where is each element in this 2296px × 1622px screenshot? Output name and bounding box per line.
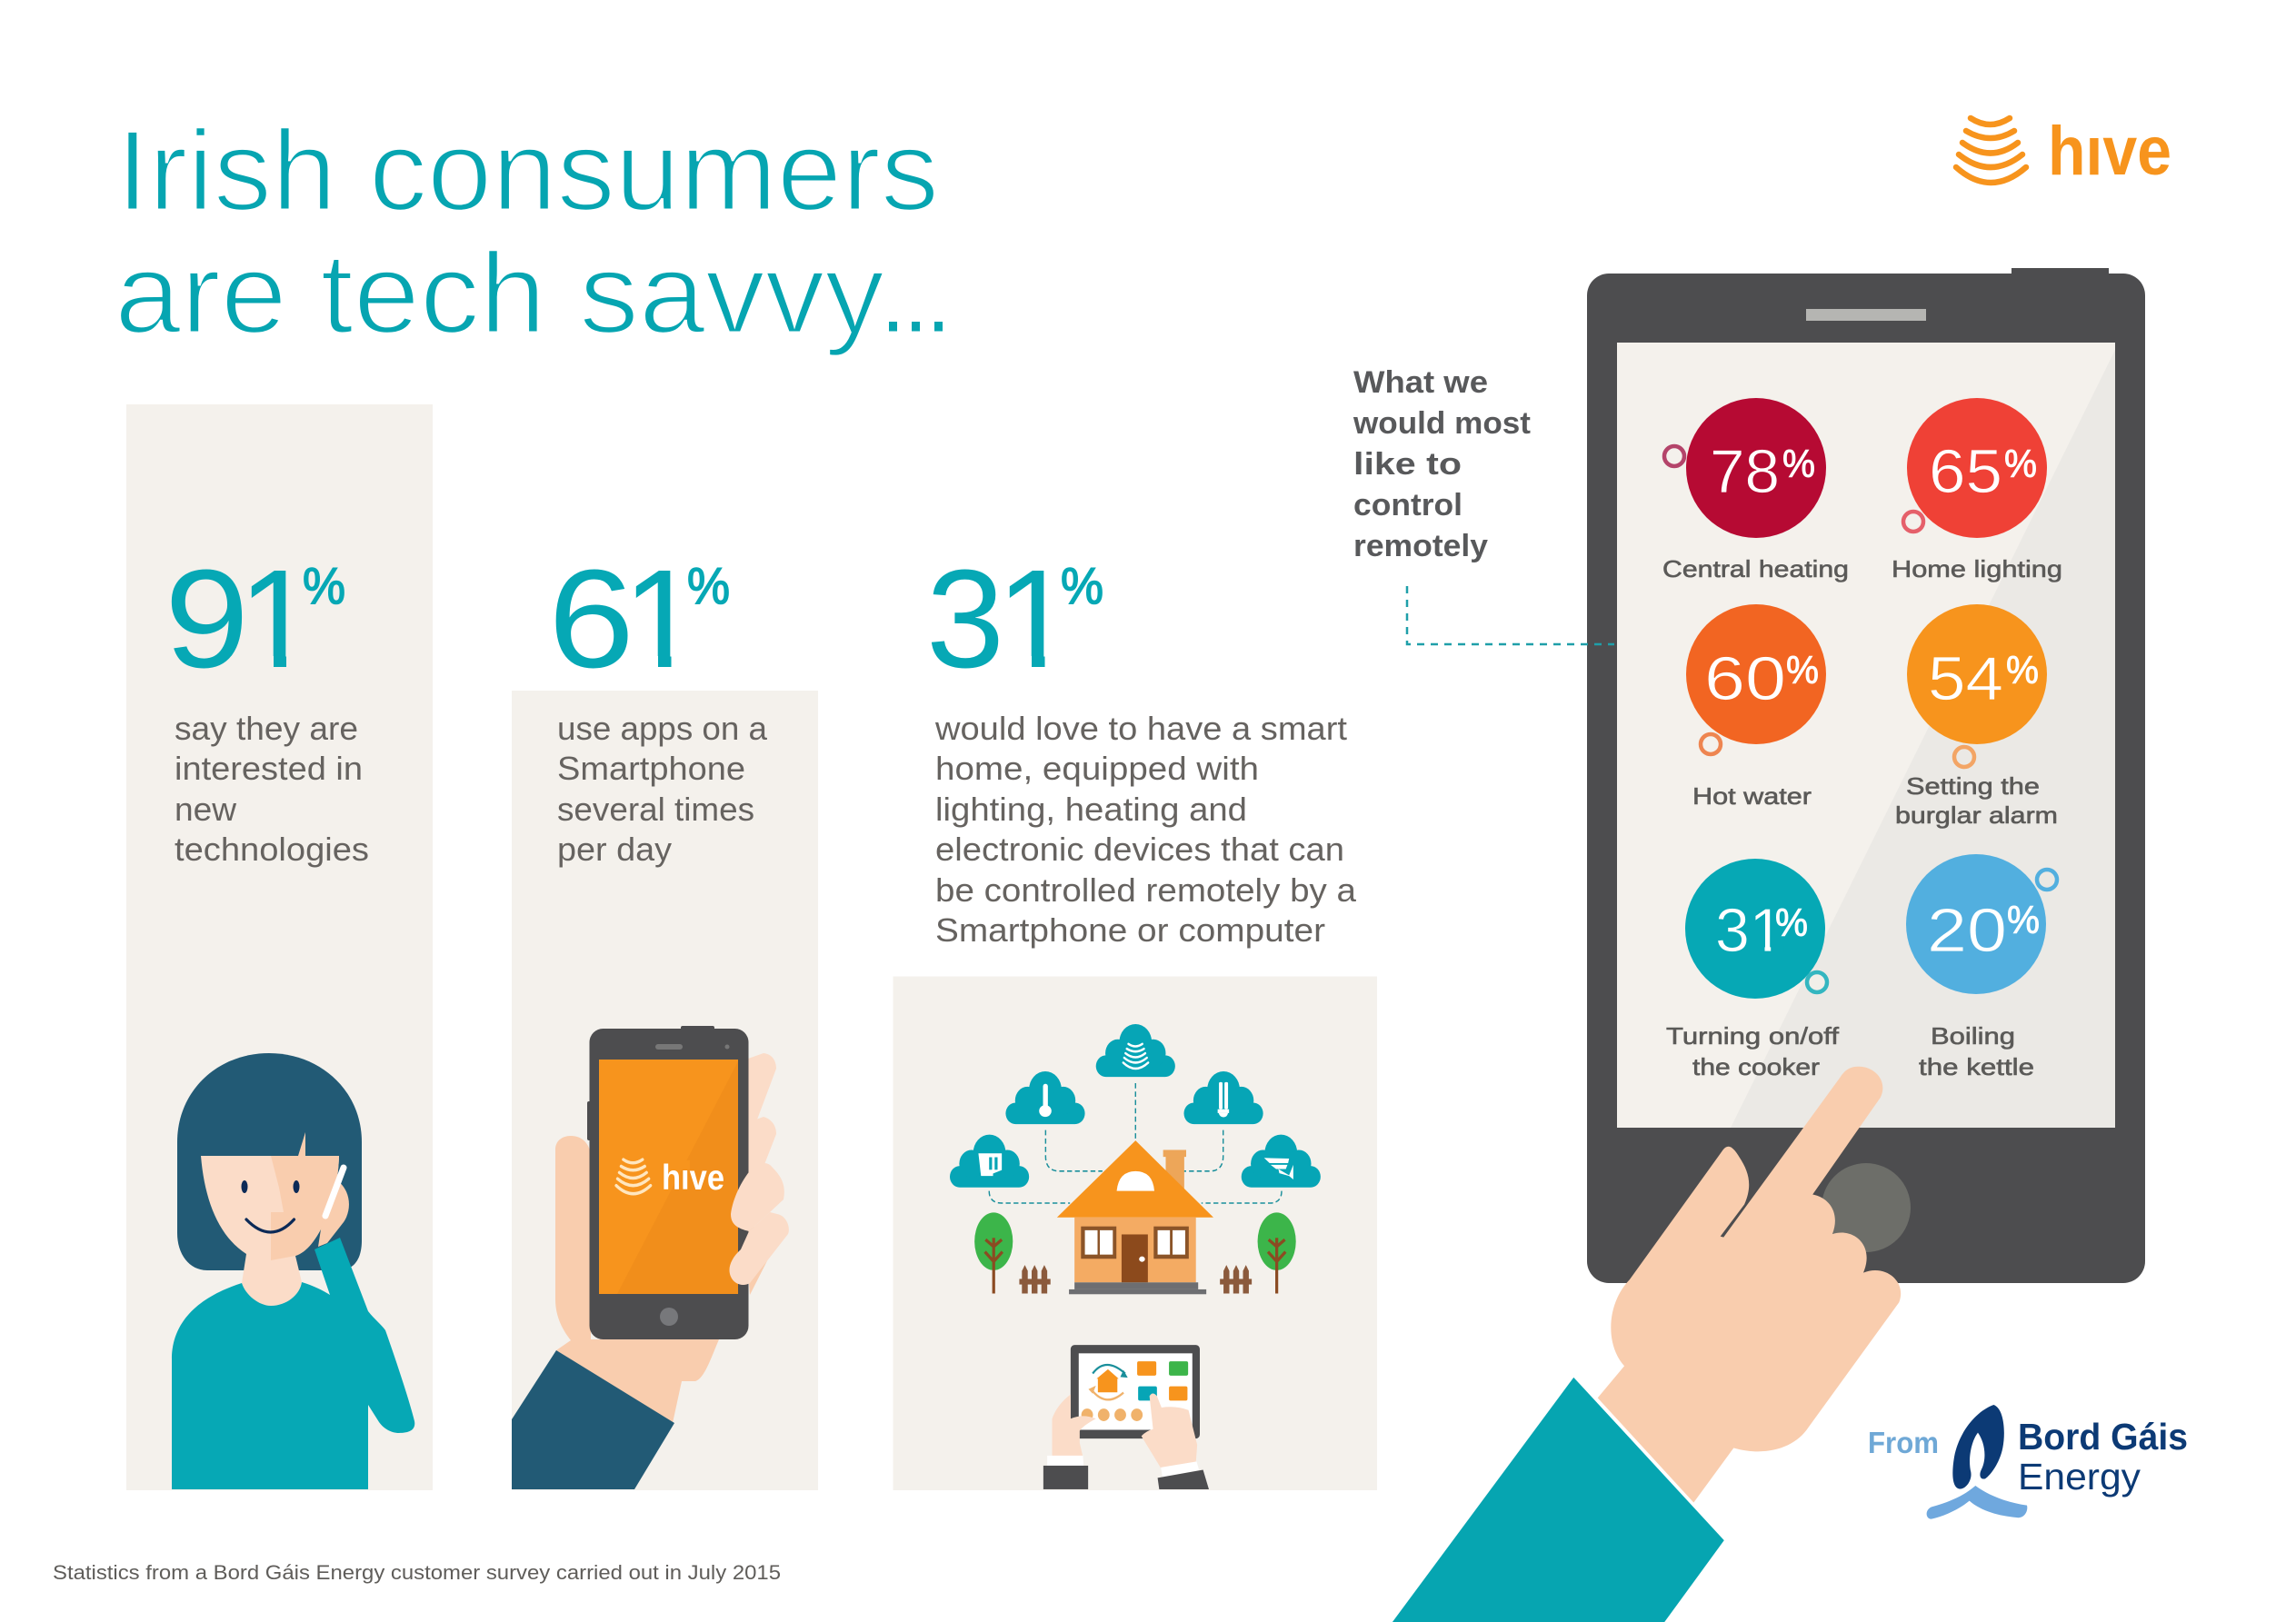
illustration: hand holding smartphone <box>512 1026 789 1489</box>
icon: hive logo on phone screen <box>616 1159 724 1198</box>
stat: 31% turning on/off the cooker: % <box>1775 901 1808 945</box>
statistic: 31%: 3 <box>926 541 1004 697</box>
stat: 31% turning on/off the cooker <box>1666 859 1840 1080</box>
title: are tech savvy <box>115 229 884 357</box>
statistic: 31%: % <box>1061 557 1103 615</box>
stat: 60% hot water <box>1686 604 1826 810</box>
illustration: hands using tablet <box>1043 1345 1209 1489</box>
text: what we would most like to control remotely: like to <box>1353 447 1462 482</box>
title: Irish consumers <box>116 106 939 234</box>
stat: 54% setting the burglar alarm: burglar alarm <box>1895 801 2058 829</box>
text: 61% description: Smartphone <box>557 750 745 787</box>
statistic: 61%: % <box>687 557 730 615</box>
panel: 31% smart home text <box>926 541 1357 949</box>
text: 91% description: interested in <box>175 750 363 787</box>
text: 31% description: electronic devices that can <box>935 831 1344 868</box>
text: 31% description: Smartphone or computer <box>935 911 1325 949</box>
panel: smart home illustration <box>893 976 1377 1490</box>
stat: 54% setting the burglar alarm: 54 <box>1928 644 2003 713</box>
text: what we would most like to control remotely: What we <box>1353 365 1488 400</box>
connector: dashed line to phone <box>1407 586 1614 644</box>
stat: 60% hot water: % <box>1786 649 1819 692</box>
stat: 78% central heating <box>1662 398 1849 582</box>
logo: from Bord Gáis Energy <box>1868 1405 2188 1519</box>
icon: cloud with light bulb <box>1183 1071 1263 1124</box>
stat: 20% boiling the kettle: the kettle <box>1919 1053 2034 1080</box>
text: what we would most like to control remotely: control <box>1353 488 1462 522</box>
logo: from Bord Gáis Energy: Energy <box>2018 1456 2141 1498</box>
statistic: 31% <box>926 541 1103 697</box>
logo: hive <box>1956 113 2171 190</box>
illustration: fences <box>1019 1265 1252 1294</box>
statistic: 61% <box>548 541 730 697</box>
statistic: 91%: 9 <box>165 541 249 697</box>
text: what we would most like to control remotely: remotely <box>1353 529 1488 563</box>
stat: 20% boiling the kettle: 20 <box>1927 896 2007 965</box>
logo: from Bord Gáis Energy: Bord Gáis <box>2018 1416 2188 1458</box>
icon: cloud with security camera <box>1242 1135 1321 1188</box>
stat: 20% boiling the kettle: % <box>2007 899 2040 942</box>
text: 31% description: lighting, heating and <box>935 791 1247 828</box>
stat: 54% setting the burglar alarm: Setting the <box>1906 772 2040 800</box>
stat: 31% turning on/off the cooker: 3 <box>1715 896 1750 965</box>
text: 61% description: per day <box>557 831 672 868</box>
stat: 78% central heating: 78 <box>1710 437 1780 506</box>
statistic: 31%: 1 <box>996 541 1074 697</box>
icon: cloud with thermometer <box>1005 1071 1085 1124</box>
logo: from Bord Gáis Energy: From <box>1868 1426 1939 1459</box>
text: 31% description: be controlled remotely by a <box>935 871 1357 909</box>
icon: cloud with kettle <box>950 1135 1029 1188</box>
statistic: 91% <box>165 541 345 697</box>
stat: 65% home lighting: Home lighting <box>1892 555 2062 582</box>
stat: 31% turning on/off the cooker: Turning on/off <box>1666 1022 1840 1050</box>
illustration: trees <box>974 1212 1296 1294</box>
text: what we would most like to control remotely <box>1353 365 1531 563</box>
text: 91% description <box>175 710 369 868</box>
logo: hive: hive <box>2048 113 2171 190</box>
stat: 31% turning on/off the cooker: 1 <box>1749 896 1783 965</box>
stat: 31% turning on/off the cooker: the cooker <box>1692 1053 1820 1080</box>
icon: cloud with hive logo <box>1096 1024 1175 1077</box>
text: 91% description: say they are <box>175 710 358 747</box>
text: what we would most like to control remotely: would most <box>1353 406 1531 441</box>
text: 91% description: technologies <box>175 831 369 868</box>
stat: 60% hot water: Hot water <box>1692 782 1812 810</box>
icon: hive logo on phone screen: hive <box>662 1159 724 1198</box>
title <box>115 106 945 357</box>
stat: 20% boiling the kettle: Boiling <box>1931 1022 2015 1050</box>
text: 31% description: home, equipped with <box>935 750 1259 787</box>
footnote: Statistics from a Bord Gáis Energy customer survey carried out in July 2015 <box>53 1561 781 1584</box>
illustration: woman on the phone <box>172 1053 414 1489</box>
illustration: pointing hand <box>1393 1067 1901 1622</box>
text: 31% description <box>934 710 1357 949</box>
stat: 65% home lighting: 65 <box>1929 437 2002 506</box>
text: 61% description: use apps on a <box>557 710 768 747</box>
text: 61% description: several times <box>557 791 754 828</box>
panel: 91% interested in new technologies <box>126 404 433 1490</box>
panel: large smartphone <box>1407 268 2145 1283</box>
title: ... <box>877 229 945 357</box>
text: 31% description: would love to have a smart <box>934 710 1347 747</box>
statistic: 61%: 1 <box>623 541 701 697</box>
stat: 20% boiling the kettle <box>1906 854 2057 1080</box>
statistic: 91%: 1 <box>238 541 316 697</box>
stat: 78% central heating: Central heating <box>1662 555 1849 582</box>
statistic: 91%: % <box>303 557 345 615</box>
panel: 61% use apps <box>512 541 818 1490</box>
stat: 78% central heating: % <box>1782 443 1815 486</box>
stat: 54% setting the burglar alarm: % <box>2006 649 2039 692</box>
stat: 60% hot water: 60 <box>1704 644 1786 713</box>
stat: 65% home lighting: % <box>2004 443 2037 486</box>
stat: 54% setting the burglar alarm <box>1895 604 2058 829</box>
stat: 65% home lighting <box>1892 398 2062 582</box>
text: 91% description: new <box>175 791 237 828</box>
illustration: house <box>1057 1140 1213 1294</box>
connection lines <box>989 1083 1282 1203</box>
text: 61% description <box>557 710 768 868</box>
statistic: 61%: 6 <box>548 541 634 697</box>
